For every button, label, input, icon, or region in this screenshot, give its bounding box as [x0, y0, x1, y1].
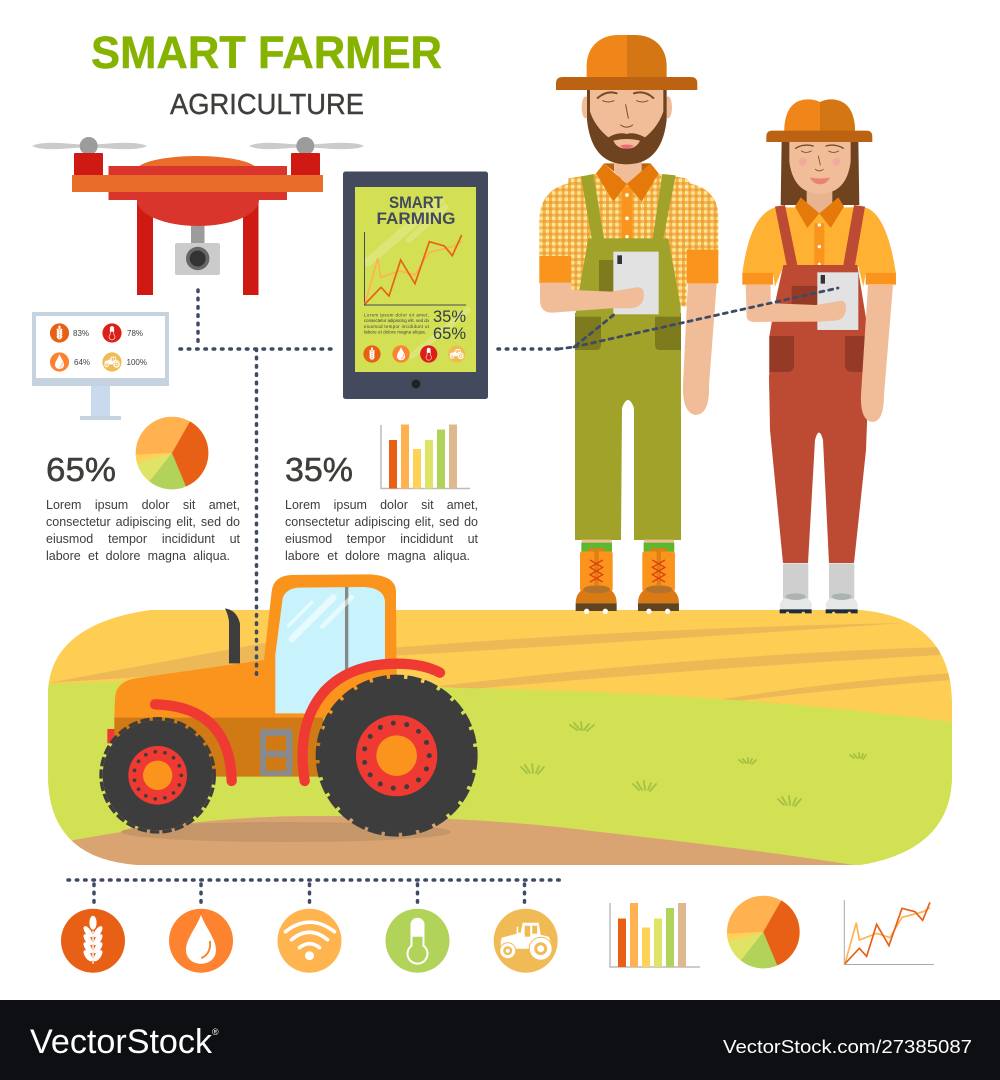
- monitor with stats: [32, 312, 169, 420]
- title: SMART FARMER: [91, 27, 442, 78]
- woman upper body: [742, 99, 896, 390]
- big percent 65: 65%: [46, 451, 116, 488]
- drone illustration: [32, 137, 364, 295]
- man face: [590, 88, 663, 137]
- tablet with smart farming screen: eiusmod tempor incididunt ut: [364, 324, 430, 329]
- dotted connector lines: [68, 288, 838, 906]
- tractor: [101, 574, 475, 834]
- woman pockets: [769, 336, 794, 372]
- man mouth: [613, 139, 640, 149]
- icon: wheat: [61, 909, 125, 973]
- field furrows: [48, 623, 952, 708]
- text block: right paragraph: Lorem ipsum dolor sit amet,: [285, 498, 478, 512]
- monitor with stats: 78%: [127, 329, 143, 338]
- footer bar: ®: [212, 1027, 219, 1037]
- monitor with stats: 100%: [126, 358, 147, 367]
- man ears: [582, 96, 590, 118]
- bottom bar chart: [610, 903, 700, 967]
- pie chart: [136, 417, 208, 489]
- footer bar: VectorStock.com/27385087: [723, 1036, 972, 1057]
- exhaust pipe: [225, 608, 240, 663]
- woman cuffs: [742, 273, 773, 285]
- text block: left paragraph: eiusmod tempor incididunt ut: [46, 532, 240, 546]
- rear wheel: [318, 677, 475, 834]
- woman trousers: [769, 375, 869, 563]
- tablet with smart farming screen: 35%: [433, 307, 466, 326]
- front bumper: [107, 729, 116, 743]
- woman neck: [807, 187, 832, 213]
- man beard: [587, 88, 667, 164]
- footer bar: [0, 1000, 1000, 1080]
- woman right arm: [861, 285, 893, 422]
- cab window: [275, 587, 385, 713]
- tablet with smart farming screen: Lorem ipsum dolor sit amet,: [364, 312, 429, 318]
- man trousers: [575, 313, 681, 540]
- monitor with stats: 83%: [73, 329, 89, 338]
- icon: wifi: [278, 909, 342, 973]
- text block: right paragraph: [285, 498, 478, 563]
- woman tablet: [817, 272, 858, 330]
- front wheel: [101, 719, 214, 832]
- woman hair: [781, 140, 859, 205]
- tractor body: [114, 574, 397, 718]
- rear mudguard: [303, 664, 440, 781]
- woman hat: [784, 99, 820, 131]
- text block: right paragraph: eiusmod tempor incididunt ut: [285, 532, 478, 546]
- text block: left paragraph: [46, 498, 240, 563]
- man farmer: [539, 35, 718, 614]
- big percent 35: 35%: [285, 451, 353, 488]
- tablet with smart farming screen: [343, 172, 488, 399]
- dirt road: [48, 816, 860, 866]
- text block: left paragraph: consectetur adipiscing elit, sed do: [46, 515, 240, 529]
- woman face: [789, 140, 851, 194]
- woman cheeks: [799, 158, 807, 166]
- man overall bib: [575, 174, 681, 317]
- tablet with smart farming screen: labore et dolore magna aliqua.: [364, 330, 426, 334]
- woman overall bib: [769, 205, 869, 390]
- grill: [260, 729, 293, 776]
- man upper body: [539, 35, 718, 317]
- text block: right paragraph: labore et dolore magna aliqua.: [285, 549, 470, 563]
- subtitle: AGRICULTURE: [170, 89, 364, 121]
- tractor shadow: [121, 822, 451, 842]
- green meadow: [48, 680, 952, 865]
- text block: right paragraph: consectetur adipiscing elit, sed do: [285, 515, 478, 529]
- man pockets: [575, 313, 681, 350]
- grass tufts: [521, 722, 866, 806]
- bottom line chart: [844, 900, 934, 964]
- man boots: [576, 540, 679, 614]
- woman boots: [780, 563, 858, 615]
- text block: left paragraph: Lorem ipsum dolor sit amet,: [46, 498, 240, 512]
- propellers: [32, 137, 364, 155]
- icon: water drop: [169, 909, 233, 973]
- man eyes and brows: [598, 92, 653, 127]
- woman farmer: [742, 99, 896, 615]
- man collar: [596, 163, 659, 202]
- text block: left paragraph: labore et dolore magna aliqua.: [46, 549, 230, 563]
- man cuffs: [539, 256, 571, 283]
- woman eyes and brows: [796, 145, 843, 171]
- tablet with smart farming screen: FARMING: [376, 210, 456, 228]
- tablet with smart farming screen: consectetur adipiscing elit, sed do: [364, 318, 430, 323]
- man tablet: [613, 252, 659, 314]
- man forearm and hand: [540, 283, 644, 313]
- man hat: [587, 35, 627, 77]
- woman forearm and hand: [746, 285, 846, 322]
- monitor with stats: 64%: [74, 358, 90, 367]
- woman collar: [795, 197, 844, 228]
- icon: tractor: [494, 909, 558, 973]
- bar chart: [381, 424, 470, 488]
- tablet with smart farming screen: SMART: [389, 194, 443, 212]
- tablet with smart farming screen: 65%: [433, 324, 466, 343]
- man neck: [614, 162, 642, 184]
- woman mouth: [810, 178, 830, 184]
- bottom pie chart: [727, 896, 800, 968]
- field landscape: [48, 610, 952, 866]
- front mudguard: [155, 704, 232, 781]
- icon: thermometer: [386, 909, 450, 973]
- woman shirt: [742, 207, 896, 287]
- camera: [175, 243, 220, 275]
- man shirt: [539, 173, 718, 307]
- man right arm: [683, 280, 717, 415]
- footer bar: VectorStock: [30, 1023, 213, 1061]
